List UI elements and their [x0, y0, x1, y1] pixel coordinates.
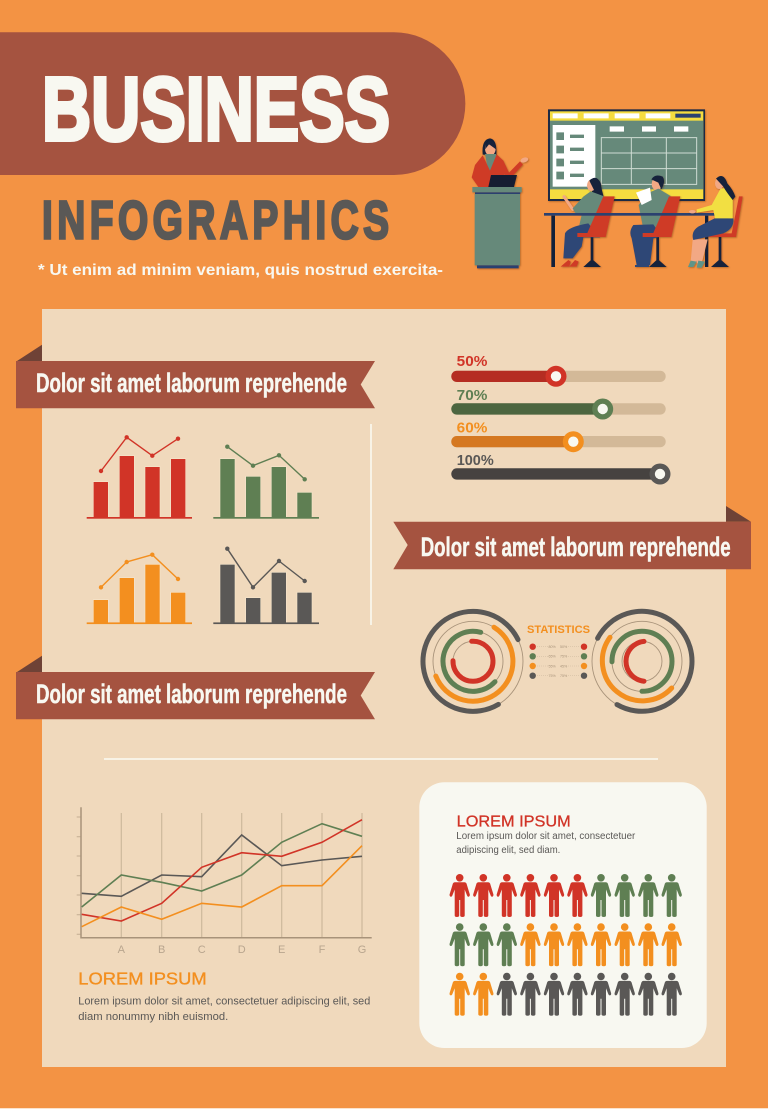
- table: [544, 213, 717, 267]
- pictogram row 2: [450, 923, 682, 966]
- statistics legend: [530, 644, 587, 679]
- pictogram row 3: [450, 973, 682, 1016]
- statistics legend: 50%: [560, 645, 568, 649]
- statistics legend: 75%: [560, 674, 568, 678]
- line chart: B: [158, 944, 165, 956]
- statistics legend: 75%: [548, 674, 556, 678]
- text block: bottom left: [78, 995, 370, 1023]
- statistics legend: 55%: [548, 664, 556, 668]
- progress bar: 60%: 60%: [457, 419, 487, 436]
- bar chart: red: [87, 435, 192, 519]
- progress bar: 100%: 100%: [457, 452, 494, 469]
- progress bar: 100%: [451, 452, 670, 484]
- heading: lorem ipsum red: LOREM IPSUM: [457, 814, 571, 831]
- line chart: F: [319, 944, 326, 956]
- text block: bottom left: Lorem ipsum dolor sit amet, consectetuer adipiscing elit, sed: [78, 995, 370, 1007]
- line chart: E: [278, 944, 285, 956]
- ribbon heading 3: Dolor sit amet laborum reprehende: [36, 679, 347, 709]
- text block: bottom left: diam nonummy nibh euismod.: [78, 1011, 228, 1023]
- line chart: D: [238, 944, 246, 956]
- ring chart: left: [423, 611, 523, 711]
- text block: card: Lorem ipsum dolor sit amet, consectetuer: [456, 831, 636, 842]
- panel: people card: [419, 782, 707, 1048]
- divider: horizontal: [104, 758, 658, 760]
- progress bar: 50%: 50%: [457, 353, 487, 370]
- ribbon heading 1: Dolor sit amet laborum reprehende: [36, 368, 347, 398]
- bar chart: green: [213, 444, 319, 519]
- illustration: business meeting: [472, 109, 743, 268]
- bar chart: orange: [87, 552, 192, 624]
- presenter at podium: [472, 138, 529, 268]
- text block: card: [456, 831, 636, 856]
- text block: card: adipiscing elit, sed diam.: [456, 845, 560, 856]
- line chart: G: [358, 944, 366, 956]
- ribbon heading 1: [16, 345, 375, 408]
- chair and seated person 3: [688, 176, 743, 268]
- bottom edge line: [0, 1108, 768, 1109]
- ribbon heading 3: [16, 656, 375, 719]
- statistics legend: 80%: [548, 645, 556, 649]
- heading: lorem ipsum orange: LOREM IPSUM: [78, 968, 207, 988]
- main panel: [42, 309, 726, 1067]
- title: INFOGRAPHICS: INFOGRAPHICS: [42, 189, 389, 250]
- statistics heading: STATISTICS: [527, 624, 590, 636]
- line chart: A: [118, 944, 126, 956]
- screen: [548, 109, 705, 201]
- progress bar: 60%: [451, 419, 666, 452]
- statistics legend: 45%: [560, 664, 568, 668]
- progress bar: 50%: [451, 353, 666, 387]
- pictogram row 1: [450, 874, 682, 917]
- statistics legend: 65%: [548, 655, 556, 659]
- header banner: [0, 32, 465, 175]
- title: BUSINESS: BUSINESS: [42, 60, 390, 160]
- ring chart: right: [592, 611, 692, 711]
- chair and seated person 1: [561, 178, 615, 267]
- progress bar: 70%: [451, 387, 666, 420]
- subtitle: * Ut enim ad minim veniam, quis nostrud exercita-: [38, 262, 443, 279]
- chair and seated person 2: [630, 175, 680, 267]
- progress bar: 70%: 70%: [457, 387, 487, 404]
- line chart: [77, 807, 372, 956]
- line chart: C: [198, 944, 206, 956]
- ribbon heading 2: [393, 506, 751, 569]
- divider: vertical: [370, 424, 372, 625]
- bar chart: dark grey: [213, 546, 319, 624]
- statistics legend: 75%: [560, 655, 568, 659]
